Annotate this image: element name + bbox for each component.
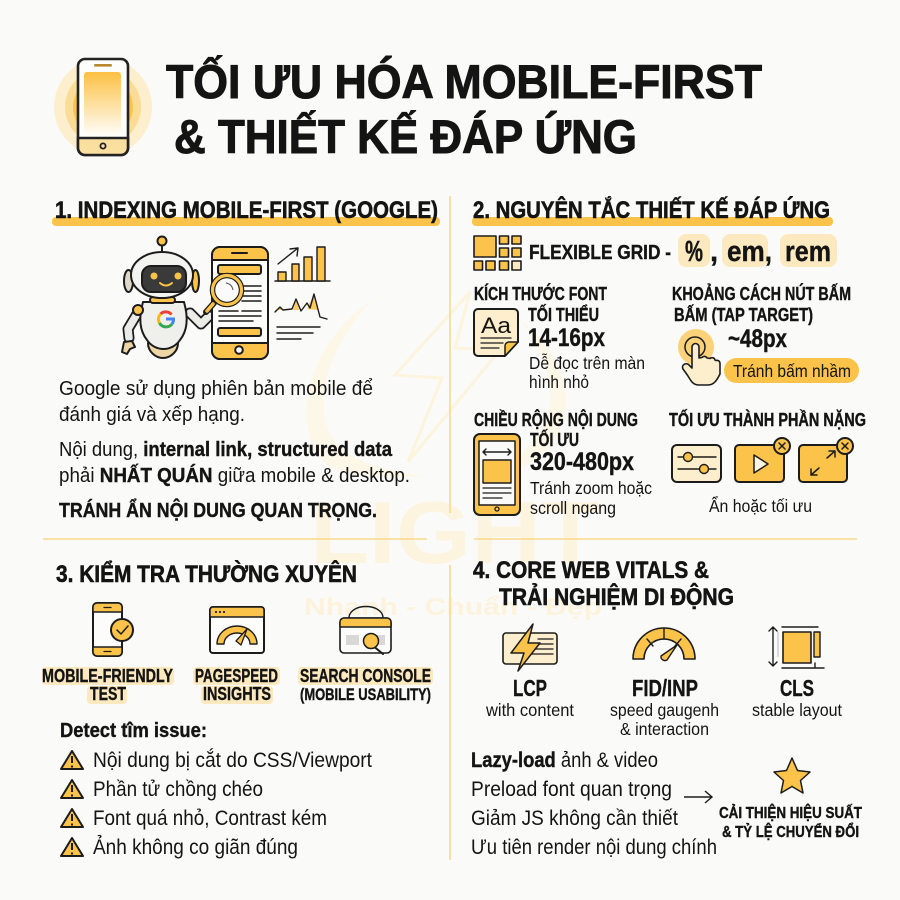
issue row 2: Phần tử chồng chéo: [93, 777, 263, 801]
metric: CLS: stable layout: [752, 700, 842, 720]
block: tap target: Tránh bấm nhầm: [733, 361, 851, 381]
text block: indexing description: Google sử dụng phiên bản mobile để: [59, 377, 373, 400]
panel: core web vitals: [471, 557, 862, 859]
block: optimize heavy components: Ẩn hoặc tối ưu: [709, 495, 812, 516]
list: detected issues: [60, 720, 372, 859]
panel: regular testing: [42, 560, 433, 859]
metric: CLS: [752, 627, 842, 720]
heading: section 4: TRẢI NGHIỆM DI ĐỘNG: [499, 582, 734, 611]
metric: LCP: [485, 624, 574, 720]
metric: LCP: with content: [485, 700, 574, 720]
tool: mobile-friendly test: MOBILE-FRIENDLY: [42, 666, 173, 686]
heading: section 1: 1. INDEXING MOBILE-FIRST (GOOGLE): [55, 197, 438, 224]
list: optimization actions: [471, 748, 717, 859]
list: optimization actions: Giảm JS không cần thiết: [471, 806, 678, 830]
tool: PageSpeed Insights: INSIGHTS: [203, 684, 271, 704]
metric: CLS: CLS: [780, 675, 814, 701]
block: minimum font size: hình nhỏ: [529, 372, 589, 392]
title: & THIẾT KẾ ĐÁP ỨNG: [174, 110, 637, 163]
block: content width: CHIỀU RỘNG NỘI DUNG: [474, 409, 638, 430]
text: flexible grid units: em,: [727, 236, 772, 268]
metric: FID/INP: [610, 628, 719, 739]
text: flexible grid units: [529, 234, 837, 268]
block: minimum font size: 14-16px: [528, 324, 605, 352]
block: content width: scroll ngang: [530, 498, 616, 518]
text: flexible grid units: rem: [785, 236, 831, 268]
icon: star: [774, 758, 810, 793]
block: tap target: BẤM (TAP TARGET): [674, 304, 813, 325]
text block: indexing description: Nội dung, internal link, structured data: [59, 438, 393, 461]
tool: Search Console: SEARCH CONSOLE: [300, 666, 431, 686]
icon: video hidden: [735, 438, 790, 482]
icon: tapping hand: [678, 329, 720, 385]
block: minimum font size: Dễ đọc trên màn: [529, 352, 645, 373]
block: minimum font size: TỐI THIỂU: [528, 304, 599, 325]
issue row 1: Nội dung bị cắt do CSS/Viewport: [93, 747, 372, 772]
callout: outcome: CẢI THIỆN HIỆU SUẤT: [719, 803, 862, 822]
tool: Search Console: (MOBILE USABILITY): [300, 685, 431, 704]
text block: indexing description: đánh giá và xếp hạng.: [59, 403, 245, 426]
heading: section 3: 3. KIỂM TRA THƯỜNG XUYÊN: [56, 560, 357, 588]
block: minimum font size: [474, 283, 645, 392]
icon: expand hidden: [799, 438, 853, 482]
tool: PageSpeed Insights: PAGESPEED: [195, 666, 278, 686]
metric: FID/INP: speed gaugenh: [610, 700, 719, 720]
metric: FID/INP: FID/INP: [632, 675, 698, 701]
tool: PageSpeed Insights: [193, 607, 280, 704]
block: tap target: [672, 283, 859, 385]
block: tap target: ~48px: [728, 325, 787, 353]
icon: Aa document: [474, 309, 518, 356]
tool: Search Console: [298, 606, 433, 704]
heading: section 2: 2. NGUYÊN TẮC THIẾT KẾ ĐÁP ỨNG: [473, 196, 830, 224]
icon: sliders: [672, 445, 721, 482]
watermark: LIGHT logo: LIGHT: [310, 483, 600, 582]
chart: sparkline and text lines: [275, 294, 327, 339]
title: TỐI ƯU HÓA MOBILE-FIRST: [166, 55, 762, 108]
title: [166, 55, 762, 163]
panel: indexing mobile-first: [52, 197, 440, 522]
icon: phone in header: [54, 58, 152, 156]
block: content width: Tránh zoom hoặc: [530, 478, 652, 498]
issue row 4: Ảnh không co giãn đúng: [93, 834, 298, 859]
callout: outcome: & TỶ LỆ CHUYỂN ĐỔI: [722, 822, 859, 841]
text block: indexing description: phải NHẤT QUÁN giữa mobile & desktop.: [59, 464, 410, 487]
tool: mobile-friendly test: [42, 603, 174, 704]
icon: Aa document: Aa: [481, 313, 512, 338]
text block: indexing description: TRÁNH ẨN NỘI DUNG QUAN TRỌNG.: [59, 498, 377, 522]
block: content width: TỐI ƯU: [530, 429, 579, 450]
list: optimization actions: Lazy-load ảnh & video: [471, 748, 658, 772]
metric: FID/INP: & interaction: [620, 719, 709, 739]
block: minimum font size: KÍCH THƯỚC FONT: [474, 283, 607, 304]
callout: outcome: [719, 803, 862, 841]
arrow: actions to outcome: [684, 791, 712, 803]
block: content width: [474, 409, 652, 518]
text: flexible grid units: %: [685, 236, 703, 268]
block: tap target: KHOẢNG CÁCH NÚT BẤM: [672, 283, 851, 304]
heading: section 4: [473, 557, 734, 611]
block: optimize heavy components: [669, 409, 866, 516]
metric: LCP: LCP: [513, 675, 547, 701]
list: optimization actions: Ưu tiên render nội dung chính: [471, 835, 717, 859]
tool: mobile-friendly test: TEST: [90, 684, 126, 704]
list: detected issues: Detect tîm issue:: [60, 720, 207, 742]
panel: responsive design principles: [472, 196, 866, 518]
icon: robot with Google logo: [122, 236, 209, 358]
icon: flexible grid: [474, 236, 521, 270]
text: flexible grid units: FLEXIBLE GRID -: [529, 242, 671, 264]
block: content width: 320-480px: [530, 448, 634, 476]
text: flexible grid units: ,: [710, 236, 718, 268]
heading: section 4: 4. CORE WEB VITALS &: [473, 557, 709, 584]
text block: indexing description: [59, 377, 410, 522]
list: optimization actions: Preload font quan trọng: [471, 777, 672, 801]
divider lines: [43, 196, 857, 860]
watermark: LIGHT logo: Nhanh - Chuẩn - Đẹp: [304, 594, 602, 621]
icon: phone width: [474, 434, 520, 515]
issue row 3: Font quá nhỏ, Contrast kém: [93, 806, 327, 830]
watermark: LIGHT logo: [304, 292, 602, 621]
icon: phone with magnifier: [206, 247, 268, 359]
chart: growth bars: [275, 247, 330, 281]
